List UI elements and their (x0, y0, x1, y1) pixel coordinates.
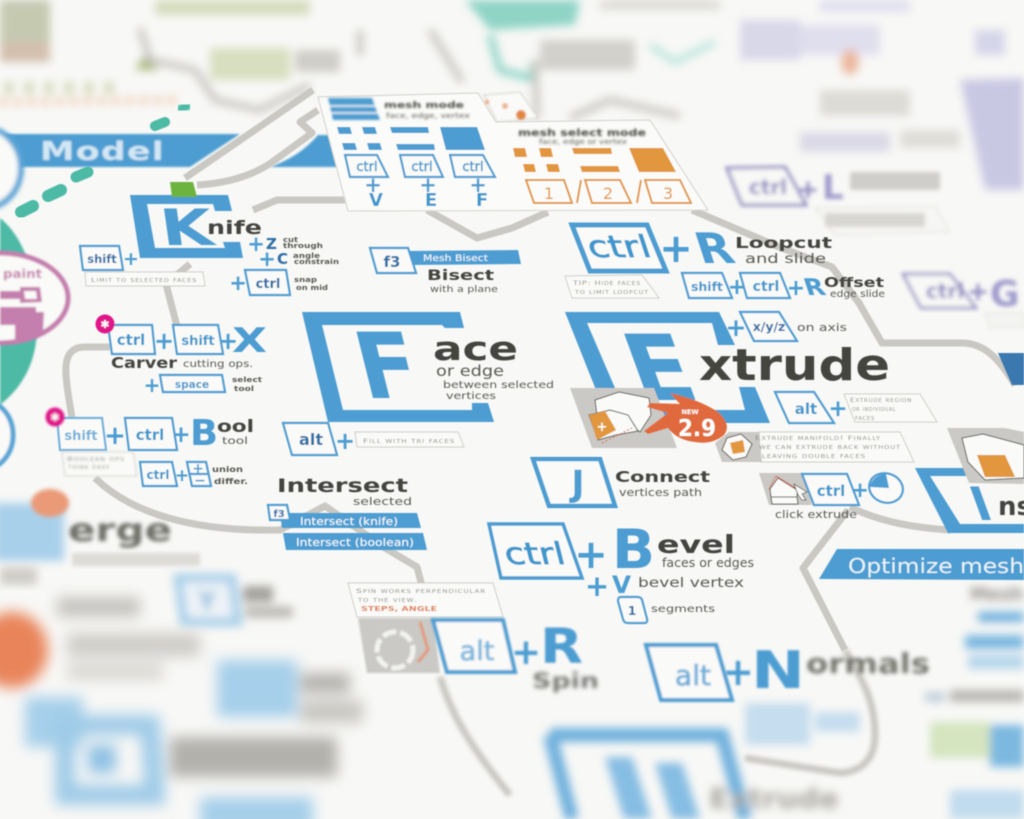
Inset box (915, 468, 1024, 533)
blurred tool: lower Extrude box (550, 735, 839, 819)
tool: Normals (646, 641, 930, 745)
E box lower (630, 387, 770, 423)
icon: pink runner (96, 314, 114, 334)
key: V: + (585, 569, 609, 603)
Bisect label: Bisect (427, 268, 494, 284)
between selected: between selected (443, 380, 554, 391)
key: segments wheel (618, 597, 647, 623)
tool: Bisect (370, 248, 521, 295)
Connect label: Connect (615, 468, 710, 486)
banner: Model: Model (40, 137, 165, 167)
nife: nife (207, 217, 262, 239)
purple key: ctrl L: ctrl (749, 175, 787, 199)
f3 label: f3 (384, 253, 400, 271)
lower blurred paths (440, 650, 875, 795)
key: V (585, 569, 631, 603)
plus N: + (722, 650, 754, 694)
key: ctrl snap: + (229, 271, 247, 295)
icon: dashed orange marker box (484, 92, 538, 122)
selected: selected (353, 495, 412, 508)
key: alt region: or individual (852, 405, 896, 413)
B letter: B (612, 518, 655, 581)
key: space: select (232, 376, 263, 384)
key row (57, 413, 218, 454)
evel label: evel (657, 530, 735, 559)
note: limit: Limit to selected faces (91, 276, 197, 284)
vertices: vertices (446, 391, 496, 402)
key: C angle constrain: angle (293, 252, 320, 260)
badge: new 2.9: 2.9 (678, 416, 716, 442)
tool: Face (283, 312, 554, 455)
icon: mouse (865, 469, 907, 507)
band: Intersect knife (280, 513, 421, 528)
purple key: ctrl G: ctrl (926, 279, 964, 303)
Carver label: Carver (111, 354, 178, 372)
key: alt (433, 620, 515, 672)
blurred tool: Flip (178, 578, 293, 622)
ctrl label: ctrl (582, 230, 656, 265)
Spin label: Spin (532, 669, 599, 693)
key: ctrl F: + (469, 173, 487, 197)
key row: X (232, 321, 267, 361)
faces or edges: faces or edges (662, 556, 754, 570)
badge: new 2.9 (644, 393, 727, 443)
purple key: ctrl G: + (967, 277, 989, 307)
mesh mode heading: face, edge, vertex (386, 112, 470, 120)
keys: union differ: union (212, 465, 243, 474)
image: extrude cube: + (597, 420, 607, 435)
cutting ops: cutting ops. (183, 359, 253, 370)
key row: + (104, 421, 126, 451)
purple key: ctrl G (903, 274, 1024, 328)
key: ctrl F: ctrl (462, 160, 484, 175)
tool: Inset (915, 353, 1024, 533)
blurred option keys (745, 703, 860, 745)
key: Z cut through (247, 232, 323, 256)
key: alt: alt (460, 636, 494, 667)
banner: Optimize mesh: Optimize mesh (848, 554, 1024, 578)
band: Intersect boolean: Intersect (boolean) (296, 536, 414, 549)
R letter: R (689, 225, 740, 274)
band label: Mesh Bisect (423, 254, 489, 264)
key: ctrl F: F (476, 190, 488, 211)
Offset row: Offset (824, 276, 884, 291)
purple key: ctrl L: + (797, 175, 819, 205)
and slide: and slide (745, 252, 826, 267)
key: alt region: Extrude region (850, 396, 912, 404)
key: ctrl snap: snap (294, 276, 317, 284)
banner: Optimize mesh (819, 549, 1024, 580)
tool: Connect (533, 459, 710, 506)
ace: ace (433, 329, 518, 368)
keys: union differ: − (194, 473, 206, 489)
key: ctrl V (345, 155, 388, 211)
ctrl label: ctrl (500, 537, 569, 572)
Loopcut label: Loopcut (735, 234, 832, 252)
key: C angle constrain: + (258, 247, 276, 271)
green region at far left (0, 218, 37, 405)
key row (108, 321, 267, 361)
icon: pink runner (46, 408, 64, 426)
panel: mesh mode card (318, 93, 708, 211)
key: alt region: + (828, 396, 848, 422)
purple key: ctrl L: L (822, 168, 844, 208)
key: J (533, 459, 615, 506)
note: boolean (62, 452, 137, 476)
K letter: K (156, 198, 219, 257)
Offset row: edge slide (830, 289, 885, 300)
keys: union differ: differ. (214, 477, 248, 486)
key: Z cut through: cut (283, 236, 299, 244)
key: V: V (612, 571, 631, 599)
image: dial (358, 618, 440, 673)
key: alt: alt (675, 659, 711, 692)
tool: Bool (46, 408, 254, 489)
teal dashed route (21, 105, 189, 212)
note: tip (565, 275, 659, 298)
key: alt (646, 645, 732, 700)
key: ctrl E: + (419, 173, 437, 197)
key: segments wheel: 1 (628, 604, 636, 618)
keys: union differ: + (175, 466, 189, 486)
plus N (722, 641, 805, 701)
note: manifold: Extrude manifold! Finally (755, 434, 881, 442)
grey connector paths (66, 90, 1015, 650)
tool: Carver (96, 314, 267, 397)
key: Z cut through: + (247, 232, 265, 256)
blurred lower-right content: Mesh (970, 584, 1024, 605)
key: f3: f3 (273, 509, 285, 520)
key: Z cut through: through (283, 242, 323, 250)
blurred tool: Merge: erge (68, 511, 172, 549)
key: alt region: faces (855, 414, 875, 422)
key: x/y/z: x/y/z (753, 319, 785, 334)
key: alt fill: Fill with tri faces (363, 437, 455, 445)
tool: click extrude (759, 469, 907, 521)
keys: 1 2 3: 2 (603, 184, 613, 203)
icon: pink runner: ✱ (100, 318, 110, 331)
tool: Spin (348, 583, 599, 693)
dark blue stub at right edge (998, 353, 1024, 385)
tool: Loopcut (565, 225, 885, 301)
tool: Knife (80, 182, 339, 295)
ool tool: ool (217, 417, 254, 437)
key: ctrl snap: on mid (296, 284, 328, 292)
blurred tool: Flip: Y (197, 587, 218, 617)
Offset row (682, 273, 885, 301)
keys: union differ: ctrl (147, 468, 169, 482)
key row: shift (64, 429, 98, 444)
key: ctrl E: ctrl (411, 160, 433, 175)
badge: new 2.9: NEW (681, 408, 699, 416)
mesh select mode heading: mesh select mode (518, 128, 646, 139)
ool tool: tool (222, 436, 248, 447)
icon: paint house (0, 287, 44, 342)
key: ctrl V: V (369, 190, 383, 211)
key row: shift (181, 334, 215, 349)
key: ctrl E: E (425, 190, 437, 211)
ctrl label: ctrl (817, 482, 845, 500)
key row: + (154, 327, 174, 355)
Offset row: + (728, 275, 746, 300)
note: manifold: leaving double faces (762, 452, 866, 460)
key: ctrl F (450, 155, 495, 211)
band: Intersect boolean (283, 533, 427, 550)
plus: + (851, 478, 869, 502)
note: manifold: we can extrude back without (759, 443, 901, 451)
key: space: tool (234, 385, 254, 393)
key: ctrl (489, 524, 582, 578)
key: ctrl E (400, 155, 443, 211)
Intersect label: Intersect (277, 475, 408, 497)
note: spin: Spin works perpendicular (356, 587, 486, 595)
key: f3 (370, 248, 416, 273)
band: Intersect knife: Intersect (knife) (300, 515, 398, 528)
F letter: F (344, 313, 430, 420)
key: ctrl (572, 225, 666, 271)
icon: mesh stacks (328, 98, 380, 120)
blue ring, lower left (0, 400, 13, 470)
key: f3 (268, 505, 290, 520)
ormals label: ormals (806, 647, 930, 680)
or edge: or edge (436, 362, 504, 380)
mesh mode heading: mesh mode (384, 101, 464, 111)
purple key: ctrl G: G (990, 274, 1020, 315)
key: ctrl V: + (364, 173, 382, 197)
note: spin (348, 583, 503, 617)
key: x/y/z: on axis (797, 321, 847, 334)
mesh select mode heading: face, edge or vertex (539, 138, 627, 146)
plus R: + (511, 632, 541, 673)
key: C angle constrain: constrain (294, 258, 339, 266)
key: ctrl V: ctrl (356, 160, 378, 175)
J letter: J (568, 464, 585, 505)
image: extrude cube (570, 388, 677, 448)
olive and orange dot rows (0, 88, 175, 102)
key: alt fill: alt (299, 430, 323, 449)
ool tool (217, 417, 254, 447)
key row: ctrl (117, 331, 145, 349)
icons: vertex edge face blue (337, 127, 485, 150)
with a plane: with a plane (430, 285, 499, 295)
key row: + (171, 422, 191, 448)
key: alt region: alt (795, 400, 817, 418)
key row: + (218, 327, 238, 355)
key: shift: + (123, 248, 139, 270)
keys: union differ (140, 461, 248, 489)
Offset row: + (787, 276, 805, 301)
key: ctrl snap (229, 270, 328, 295)
Knife box (130, 195, 243, 258)
panel: paint circle (0, 253, 68, 343)
Offset row: ctrl (753, 279, 779, 295)
I letter: I (963, 478, 999, 532)
key row: ctrl (136, 426, 164, 444)
Mesh Bisect band (405, 250, 521, 265)
blurred lower-right content (925, 584, 1024, 819)
plus R (511, 619, 583, 675)
segments label: segments (651, 604, 715, 615)
Offset row: R (800, 274, 829, 301)
key: shift: shift (87, 252, 117, 266)
blue ring, left edge (0, 128, 21, 208)
key: alt region (775, 392, 937, 423)
F box (302, 312, 494, 422)
note: boolean: Boolean ops (67, 455, 125, 463)
keys: 1 2 3: 1 (544, 184, 554, 203)
plus: + (659, 226, 693, 272)
xtrude label: xtrude (699, 340, 890, 391)
keys: 1 2 3 (526, 180, 691, 203)
E box (565, 312, 735, 400)
icon: pink runner: ✱ (50, 411, 60, 424)
vertices path: vertices path (619, 486, 702, 499)
note: boolean: think easy (67, 463, 110, 471)
Offset row: shift (691, 279, 723, 294)
plus N: N (751, 641, 805, 701)
purple key: ctrl L (727, 167, 1024, 328)
keys: union differ: + (192, 461, 204, 477)
bevel vertex: bevel vertex (638, 576, 744, 591)
E letter: E (610, 317, 710, 422)
note: manifold (715, 432, 914, 462)
key: space: space (175, 379, 209, 391)
note: spin: to the view. (357, 596, 418, 604)
tool: Bevel (489, 518, 754, 623)
blurred tool: Merge (0, 489, 200, 585)
note: tip: TIP: Hide faces (572, 279, 641, 287)
blurred top region (0, 0, 1024, 190)
banner: Model (0, 134, 345, 167)
key: alt fill: + (335, 427, 355, 455)
tool: Extrude (565, 312, 937, 462)
key row: B (190, 413, 218, 454)
key: C angle constrain: C (277, 250, 288, 268)
panel: paint circle: paint (3, 267, 42, 281)
key: space: + (144, 373, 160, 397)
key: x/y/z (726, 312, 847, 342)
note: spin: STEPS, ANGLE (361, 605, 437, 613)
image: inset cube (947, 428, 1024, 484)
key: x/y/z: + (726, 313, 746, 342)
key: space (144, 373, 263, 397)
note: limit (85, 272, 205, 286)
mesh select mode heading (518, 128, 646, 146)
tool: Intersect (268, 475, 427, 550)
blurred tool: lower Extrude box: Extrude (709, 782, 839, 815)
plus R: R (540, 619, 583, 675)
key: Z cut through: Z (266, 235, 277, 253)
key: ctrl (802, 474, 859, 505)
key: ctrl snap: ctrl (256, 277, 280, 292)
keys: 1 2 3: 3 (663, 184, 673, 203)
icon: green tab (170, 182, 197, 197)
icons: vertex edge face orange (513, 148, 676, 172)
image: click extrude (759, 473, 812, 505)
blurred lower-left content (0, 597, 363, 819)
plus: + (574, 532, 608, 578)
mesh mode heading (384, 101, 470, 120)
click extrude label: click extrude (775, 509, 857, 521)
key: C angle constrain (258, 247, 339, 271)
key: shift (80, 246, 139, 270)
key: alt fill (283, 423, 464, 455)
note: tip: to limit loopcut (574, 288, 649, 296)
